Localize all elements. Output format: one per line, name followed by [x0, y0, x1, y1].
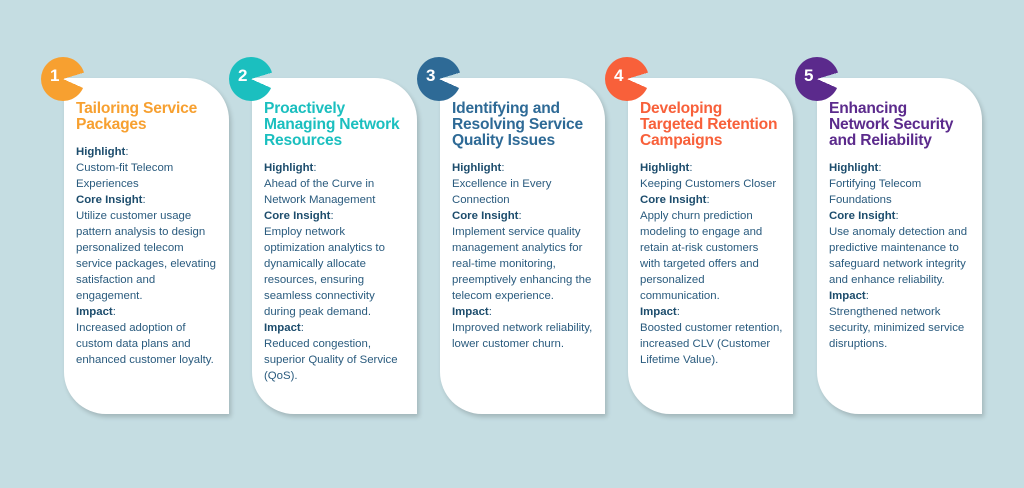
- body 3: Implement service quality management analytics for real-time monitoring, preemptively enhancing the telecom experience.: [452, 226, 591, 302]
- title 3: Identifying and Resolving Service Quality Issues: [452, 100, 583, 149]
- body 2: Highlight:: [264, 162, 317, 174]
- title 1: Tailoring Service Packages: [76, 100, 197, 133]
- body 1: Custom-fit Telecom Experiences: [76, 162, 173, 190]
- body 2: Employ network optimization analytics to dynamically allocate resources, ensuring seamless connectivity during peak demand.: [264, 226, 385, 318]
- card 5: [817, 78, 982, 414]
- body 3: [452, 162, 592, 350]
- body 3: Impact:: [452, 306, 492, 318]
- title 5: and Reliability: [829, 132, 932, 149]
- body 2: [264, 162, 398, 382]
- title 5: Enhancing: [829, 100, 907, 117]
- body 4: Boosted customer retention,: [640, 322, 782, 334]
- body 1: [76, 146, 216, 366]
- body 3: Core Insight:: [452, 210, 522, 222]
- badge 2: [229, 57, 273, 101]
- badge 3: [417, 57, 461, 101]
- title 5: [829, 100, 954, 149]
- badge 4: [605, 57, 649, 101]
- title 2: Proactively Managing Network Resources: [264, 100, 399, 149]
- badge 2: 2: [238, 66, 247, 85]
- body 4: Apply churn prediction modeling to engage and retain at-risk customers with targeted offers and personalized communication.: [640, 210, 762, 302]
- body 1: Increased adoption of custom data plans and enhanced customer loyalty.: [76, 322, 214, 366]
- body 3: Excellence in Every Connection: [452, 178, 551, 206]
- body 4: Lifetime Value).: [640, 354, 718, 366]
- body 4: Highlight:: [640, 162, 693, 174]
- body 4: Core Insight:: [640, 194, 710, 206]
- card 1: [64, 78, 229, 414]
- body 3: Highlight:: [452, 162, 505, 174]
- card 2: [252, 78, 417, 414]
- badge 1: 1: [50, 66, 59, 85]
- title 4: Developing Targeted Retention Campaigns: [640, 100, 777, 149]
- body 5: Highlight:: [829, 162, 882, 174]
- badge 5: 5: [804, 66, 813, 85]
- body 2: Reduced congestion, superior Quality of Service (QoS).: [264, 338, 398, 382]
- body 2: Ahead of the Curve in Network Management: [264, 178, 375, 206]
- body 1: Core Insight:: [76, 194, 146, 206]
- card 3: [440, 78, 605, 414]
- body 5: Core Insight:: [829, 210, 899, 222]
- body 5: Use anomaly detection and predictive maintenance to safeguard network integrity and enhance reliability.: [829, 226, 967, 286]
- body 5: Strengthened network security, minimized service disruptions.: [829, 306, 964, 350]
- badge 3: 3: [426, 66, 435, 85]
- body 2: Impact:: [264, 322, 304, 334]
- body 5: Fortifying Telecom Foundations: [829, 178, 921, 206]
- body 5: Impact:: [829, 290, 869, 302]
- body 3: Improved network reliability, lower customer churn.: [452, 322, 592, 350]
- body 1: Highlight:: [76, 146, 129, 158]
- body 4: Keeping Customers Closer: [640, 178, 776, 190]
- body 4: increased CLV (Customer: [640, 338, 770, 350]
- badge 1: [41, 57, 85, 101]
- body 4: [640, 162, 782, 366]
- card 4: [628, 78, 793, 414]
- body 1: Utilize customer usage pattern analysis to design personalized telecom service packages, elevating satisfaction and engagement.: [76, 210, 216, 302]
- body 5: [829, 162, 967, 350]
- body 1: Impact:: [76, 306, 116, 318]
- badge 5: [795, 57, 839, 101]
- title 5: Network Security: [829, 116, 953, 133]
- body 4: Impact:: [640, 306, 680, 318]
- body 2: Core Insight:: [264, 210, 334, 222]
- badge 4: 4: [614, 66, 623, 85]
